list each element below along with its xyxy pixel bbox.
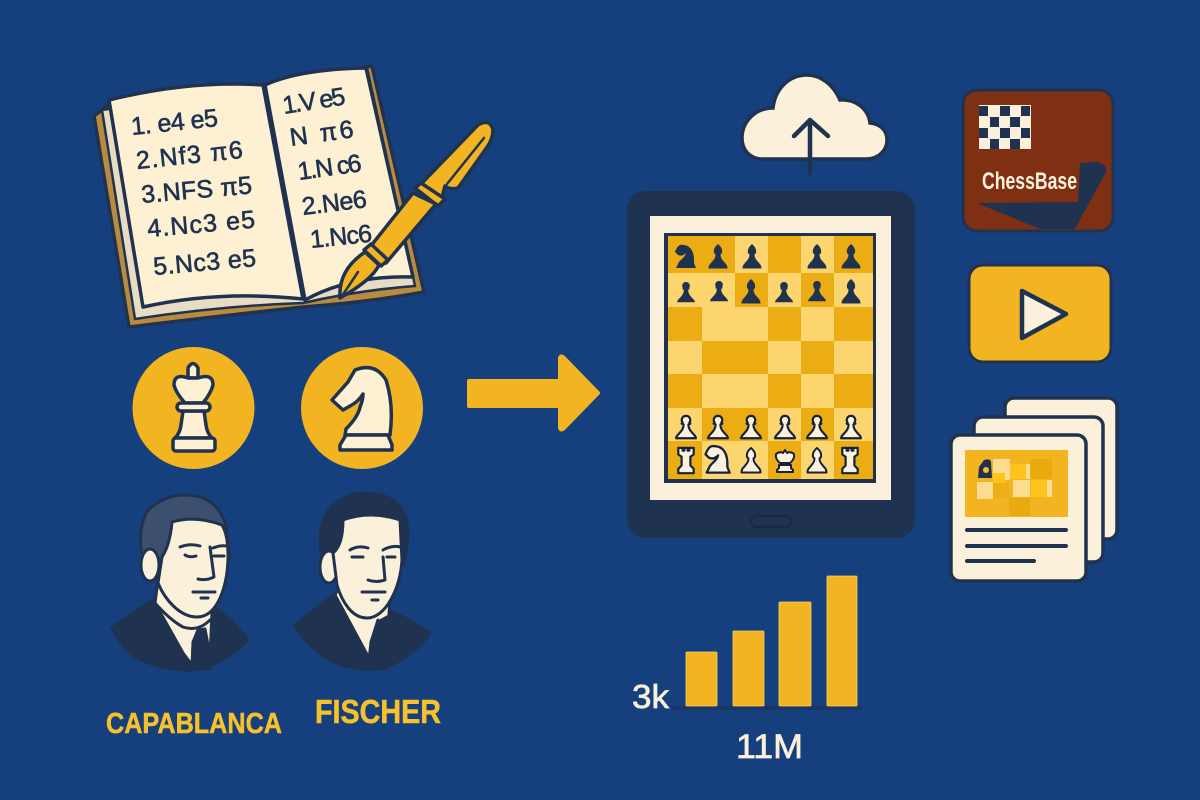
handwritten moves left page: 4.Nc3 e5: [146, 206, 256, 243]
icon: stack of article cards: [951, 398, 1117, 581]
circle icon: king: [132, 347, 254, 469]
tablet with chessboard: [627, 191, 915, 538]
icon: cloud upload: [742, 75, 887, 173]
handwritten moves right page: 2.Ne6: [300, 185, 368, 221]
book cover: [94, 66, 424, 327]
baseline: [672, 706, 863, 710]
card image: [965, 450, 1068, 517]
hair: [140, 495, 230, 560]
logo swoosh: [977, 162, 1106, 229]
icon: video play button: [969, 265, 1111, 362]
front card: [951, 435, 1086, 581]
bars: [686, 576, 857, 706]
handwritten moves left page: 2.Nf3 π6: [135, 136, 244, 175]
shirt and neck: [155, 580, 212, 665]
left page: [109, 84, 303, 307]
pen barrel: [370, 193, 436, 263]
logo wordmark: ChessBase: [982, 168, 1077, 195]
page block: [102, 68, 415, 319]
pen cap and clip: [420, 122, 493, 201]
label: Capablanca: CAPABLANCA: [106, 708, 282, 740]
handwritten moves right page: 1.V e5: [281, 82, 347, 120]
logo checker: [979, 105, 1031, 149]
arrow: to digital: [469, 356, 598, 430]
tie: [368, 620, 387, 669]
handwritten moves right page: 1.N c6: [296, 149, 363, 186]
black pieces: [675, 244, 860, 304]
pen grip: [364, 244, 388, 266]
handwritten moves right page: N π6: [288, 115, 355, 152]
circle icon: knight: [301, 347, 423, 469]
card text lines: [967, 530, 1066, 561]
facial features: [350, 546, 400, 600]
shirt and neck: [335, 575, 390, 660]
jacket: [112, 598, 248, 670]
clip line: [447, 138, 484, 184]
tie: [192, 629, 210, 669]
pen ring: [415, 183, 445, 206]
label: Fischer: FISCHER: [315, 693, 441, 730]
back card: [1005, 398, 1117, 539]
icon: open notebook with handwritten moves: [94, 66, 424, 327]
portrait: Capablanca: [112, 495, 248, 670]
pen nib: [340, 252, 379, 298]
board squares: [668, 236, 873, 479]
logo tile: [963, 90, 1113, 231]
icon: fountain pen: [340, 122, 493, 298]
jacket: [295, 595, 430, 669]
handwritten moves left page: 3.NFS π5: [140, 171, 253, 209]
high value label: 11M: [736, 728, 803, 766]
bar chart: [632, 576, 863, 766]
home button: [751, 516, 791, 527]
white pieces: [676, 416, 861, 473]
face: [333, 515, 402, 618]
handwritten moves left page: 5.Nc3 e5: [152, 244, 257, 281]
upload arrow: [794, 120, 828, 173]
board frame: [664, 233, 876, 483]
cloud: [742, 75, 887, 159]
facial features: [180, 545, 227, 598]
handwritten moves right page: [281, 82, 373, 254]
handwritten moves left page: 1. e4 e5: [130, 104, 219, 141]
icon: ChessBase logo: [963, 90, 1113, 231]
ear: [141, 549, 159, 581]
handwritten moves left page: [130, 104, 257, 281]
portrait: Fischer: [295, 493, 430, 669]
face: [158, 519, 228, 617]
ear: [320, 551, 338, 583]
handwritten moves right page: 1.Nc6: [309, 220, 373, 254]
right page: [265, 68, 413, 300]
hair: [320, 493, 408, 565]
middle card: [974, 417, 1103, 562]
screen: [650, 216, 891, 500]
tablet body: [627, 191, 915, 538]
low value label: 3k: [632, 678, 670, 715]
collar line: [155, 603, 210, 628]
